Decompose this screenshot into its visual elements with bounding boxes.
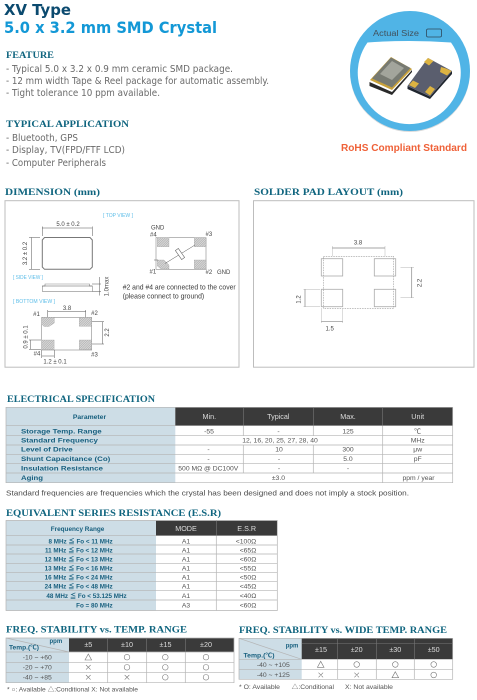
pad dimensions: 1.5 (326, 326, 335, 332)
title: XV Type (4, 1, 71, 19)
solder pads (321, 256, 396, 308)
bottom view drawing (13, 299, 111, 366)
bottom view drawing: #3 (91, 352, 98, 358)
schematic: pin connection: #3 (206, 232, 213, 238)
table header: Parameter (73, 414, 106, 421)
row labels: Level of Drive (21, 447, 73, 454)
note: pin connection (123, 284, 236, 300)
table values: - (207, 447, 210, 454)
row labels: Storage Temp. Range (21, 428, 102, 435)
row labels: Shunt Capacitance (Co) (21, 456, 110, 463)
temperature labels: -40 ~ +85 (23, 674, 52, 682)
table: freq stability vs temp range (6, 638, 234, 683)
frequency ranges: 13 MHz ≦ Fo < 16 MHz (45, 564, 113, 573)
note: standard frequencies: Standard frequencies are frequencies which the crystal has been designed and does not imply a stock position. (6, 489, 409, 498)
frequency ranges: 8 MHz ≦ Fo < 11 MHz (48, 536, 113, 546)
temperature labels: -40 ~ +125 (257, 672, 290, 679)
table values: ℃ (414, 427, 421, 435)
bottom view drawing: #2 (91, 311, 98, 317)
icon: crystal top photo (370, 57, 412, 95)
bottom view drawing: [ BOTTOM VIEW ] (13, 299, 55, 305)
availability symbols (317, 661, 437, 678)
mode and esr values: <65Ω (240, 548, 256, 555)
table header: ±15 (315, 645, 327, 654)
heading: dimension: DIMENSION (mm) (5, 187, 100, 198)
note: pin connection: (please connect to ground) (123, 294, 204, 300)
top view drawing (23, 213, 133, 269)
table: electrical specification (6, 407, 453, 483)
table header: Temp.(℃) (244, 652, 274, 660)
table values: - (278, 456, 280, 463)
table header: ±10 (121, 640, 133, 649)
side view drawing: [ SIDE VIEW ] (13, 275, 43, 281)
table header: ±30 (389, 645, 401, 654)
bottom view drawing: 1.2 ± 0.1 (43, 360, 67, 366)
table header: E.S.R (237, 524, 256, 533)
table header: ±20 (200, 640, 212, 649)
table header: ppm (50, 639, 62, 645)
table header: ±5 (84, 640, 92, 649)
row labels: Insulation Resistance (21, 465, 103, 472)
temperature labels (257, 662, 290, 679)
frequency ranges: Fo = 80 MHz (76, 603, 113, 610)
mode and esr values: <100Ω (236, 538, 256, 546)
panel: solder pad layout (254, 201, 474, 367)
mode and esr values: A1 (182, 575, 190, 582)
row labels: Standard Frequency (21, 438, 98, 444)
top view drawing: [ TOP VIEW ] (103, 213, 133, 219)
frequency ranges: 16 MHz ≦ Fo < 24 MHz (45, 573, 113, 582)
bottom view drawing: 3.8 (63, 306, 72, 312)
mode and esr values: A1 (182, 548, 190, 555)
schematic: pin connection: #1 (150, 270, 157, 276)
schematic: pin connection: #2 (206, 270, 213, 276)
table header: Typical (267, 412, 290, 421)
text block: application list: - Display, TV(FPD/FTF LCD) (6, 145, 125, 156)
table values: ppm / year (402, 475, 435, 482)
text block: feature list: - Typical 5.0 x 3.2 x 0.9 mm ceramic SMD package. (6, 64, 233, 75)
table header (9, 639, 212, 651)
heading: electrical specification: ELECTRICAL SPECIFICATION (7, 395, 155, 405)
title: 5.0 x 3.2 mm SMD Crystal (4, 18, 217, 37)
table values: ±3.0 (272, 475, 285, 482)
pad dimensions (296, 240, 424, 332)
table header: MODE (175, 524, 197, 533)
mode and esr values: <45Ω (240, 584, 256, 591)
side view drawing (13, 275, 110, 296)
badge: actual size photo circle (350, 11, 470, 132)
table header: ±50 (428, 645, 440, 654)
legend: temp range: * ○: Available △:Conditional X: Not available (7, 686, 139, 694)
mode and esr values (182, 538, 256, 610)
bottom view drawing: 2.2 (105, 328, 111, 337)
top view drawing: 3.2 ± 0.2 (23, 241, 29, 265)
bottom view drawing: 0.9 ± 0.1 (24, 325, 30, 349)
table header: ±20 (351, 645, 363, 654)
mode and esr values: A1 (182, 584, 190, 591)
heading: freq stability vs temp range: FREQ. STABILITY vs. TEMP. RANGE (6, 626, 187, 636)
text block: application list: - Computer Peripherals (6, 158, 106, 169)
table values (178, 427, 435, 482)
text block: feature list: - Tight tolerance 10 ppm available. (6, 88, 160, 99)
legend: wide temp range: △:Conditional (292, 683, 334, 691)
text block: application list: - Bluetooth, GPS (6, 133, 78, 144)
table values: 10 (275, 447, 283, 454)
table values: 500 MΩ @ DC100V (178, 465, 239, 472)
legend: wide temp range: * O: Available (239, 684, 281, 691)
temperature labels (23, 654, 52, 682)
table: freq stability vs wide temp range (239, 638, 453, 679)
temperature labels: -20 ~ +70 (23, 664, 52, 671)
table values: - (278, 465, 280, 472)
table values: MHz (411, 438, 425, 444)
mode and esr values: <40Ω (240, 593, 256, 600)
table header: Temp.(℃) (9, 644, 39, 651)
table header: Unit (411, 412, 424, 421)
frequency ranges: 24 MHz ≦ Fo < 48 MHz (45, 581, 113, 590)
schematic: pin connection: GND (151, 226, 165, 232)
label: actual size: Actual Size (373, 29, 420, 38)
legend: wide temp range (239, 683, 394, 691)
mode and esr values: <50Ω (240, 575, 256, 582)
table header: Frequency Range (51, 526, 105, 533)
table header (51, 524, 256, 533)
table header: Min. (203, 412, 216, 421)
heading: freq stability vs wide temp range: FREQ. STABILITY vs. WIDE TEMP. RANGE (239, 626, 447, 636)
frequency ranges: 48 MHz ≦ Fo < 53.125 MHz (46, 591, 127, 600)
heading: solder pad layout: SOLDER PAD LAYOUT (mm) (254, 187, 403, 198)
mode and esr values: A1 (182, 593, 190, 600)
legend: wide temp range: X: Not available (345, 684, 394, 691)
table values: 300 (342, 447, 354, 454)
mode and esr values: A3 (182, 603, 190, 610)
text block: feature list (6, 64, 269, 99)
pad dimensions: 3.8 (354, 240, 363, 246)
table values: 125 (342, 428, 354, 435)
side view drawing: 1.0max (104, 277, 110, 296)
table header (73, 412, 424, 421)
rohs label: RoHS Compliant Standard (341, 142, 467, 154)
mode and esr values: <55Ω (240, 566, 256, 573)
table: equivalent series resistance (6, 520, 277, 610)
table values: 5.0 (343, 456, 353, 463)
mode and esr values: <60Ω (240, 557, 256, 564)
table header: ±15 (160, 640, 171, 649)
table values: - (277, 428, 280, 435)
heading: feature: FEATURE (6, 51, 54, 61)
table header: Max. (340, 412, 356, 421)
note: pin connection: #2 and #4 are connected to the cover (123, 284, 236, 292)
top view drawing: 5.0 ± 0.2 (56, 222, 80, 228)
frequency ranges: 11 MHz ≦ Fo < 12 MHz (45, 546, 113, 555)
table header (244, 644, 440, 660)
bottom view drawing: #1 (33, 312, 40, 318)
availability symbols (85, 654, 209, 680)
title (4, 1, 217, 37)
row labels (21, 428, 110, 482)
icon: actual size outline (426, 29, 442, 37)
heading: typical application: TYPICAL APPLICATION (6, 120, 129, 130)
bottom view drawing: #4 (34, 352, 41, 358)
table header: ppm (286, 644, 298, 650)
text block: application list (6, 133, 125, 169)
panel: dimension (5, 201, 239, 367)
table values: - (207, 456, 210, 463)
frequency ranges (45, 536, 127, 610)
schematic: pin connection: GND (217, 270, 231, 276)
mode and esr values: <60Ω (240, 603, 256, 610)
text block: feature list: - 12 mm width Tape & Reel package for automatic assembly. (6, 76, 269, 87)
pad dimensions: 2.2 (418, 278, 424, 287)
row labels: Aging (21, 475, 43, 482)
table values: 12, 16, 20, 25, 27, 28, 40 (242, 438, 318, 444)
heading: equivalent series resistance: EQUIVALENT SERIES RESISTANCE (E.S.R) (6, 508, 221, 519)
temperature labels: -40 ~ +105 (257, 662, 290, 669)
frequency ranges: 12 MHz ≦ Fo < 13 MHz (45, 555, 113, 564)
icon: crystal bottom photo (408, 58, 452, 99)
table values: - (347, 465, 349, 472)
table values: -55 (204, 428, 214, 435)
schematic: pin connection (150, 226, 231, 276)
mode and esr values: A1 (182, 557, 190, 564)
temperature labels: -10 ~ +60 (23, 654, 52, 662)
mode and esr values: A1 (182, 538, 190, 546)
schematic: pin connection: #4 (150, 232, 157, 238)
pad dimensions: 1.2 (296, 295, 302, 304)
table values: μw (413, 447, 422, 454)
table values: pF (414, 456, 422, 463)
mode and esr values: A1 (182, 566, 190, 573)
